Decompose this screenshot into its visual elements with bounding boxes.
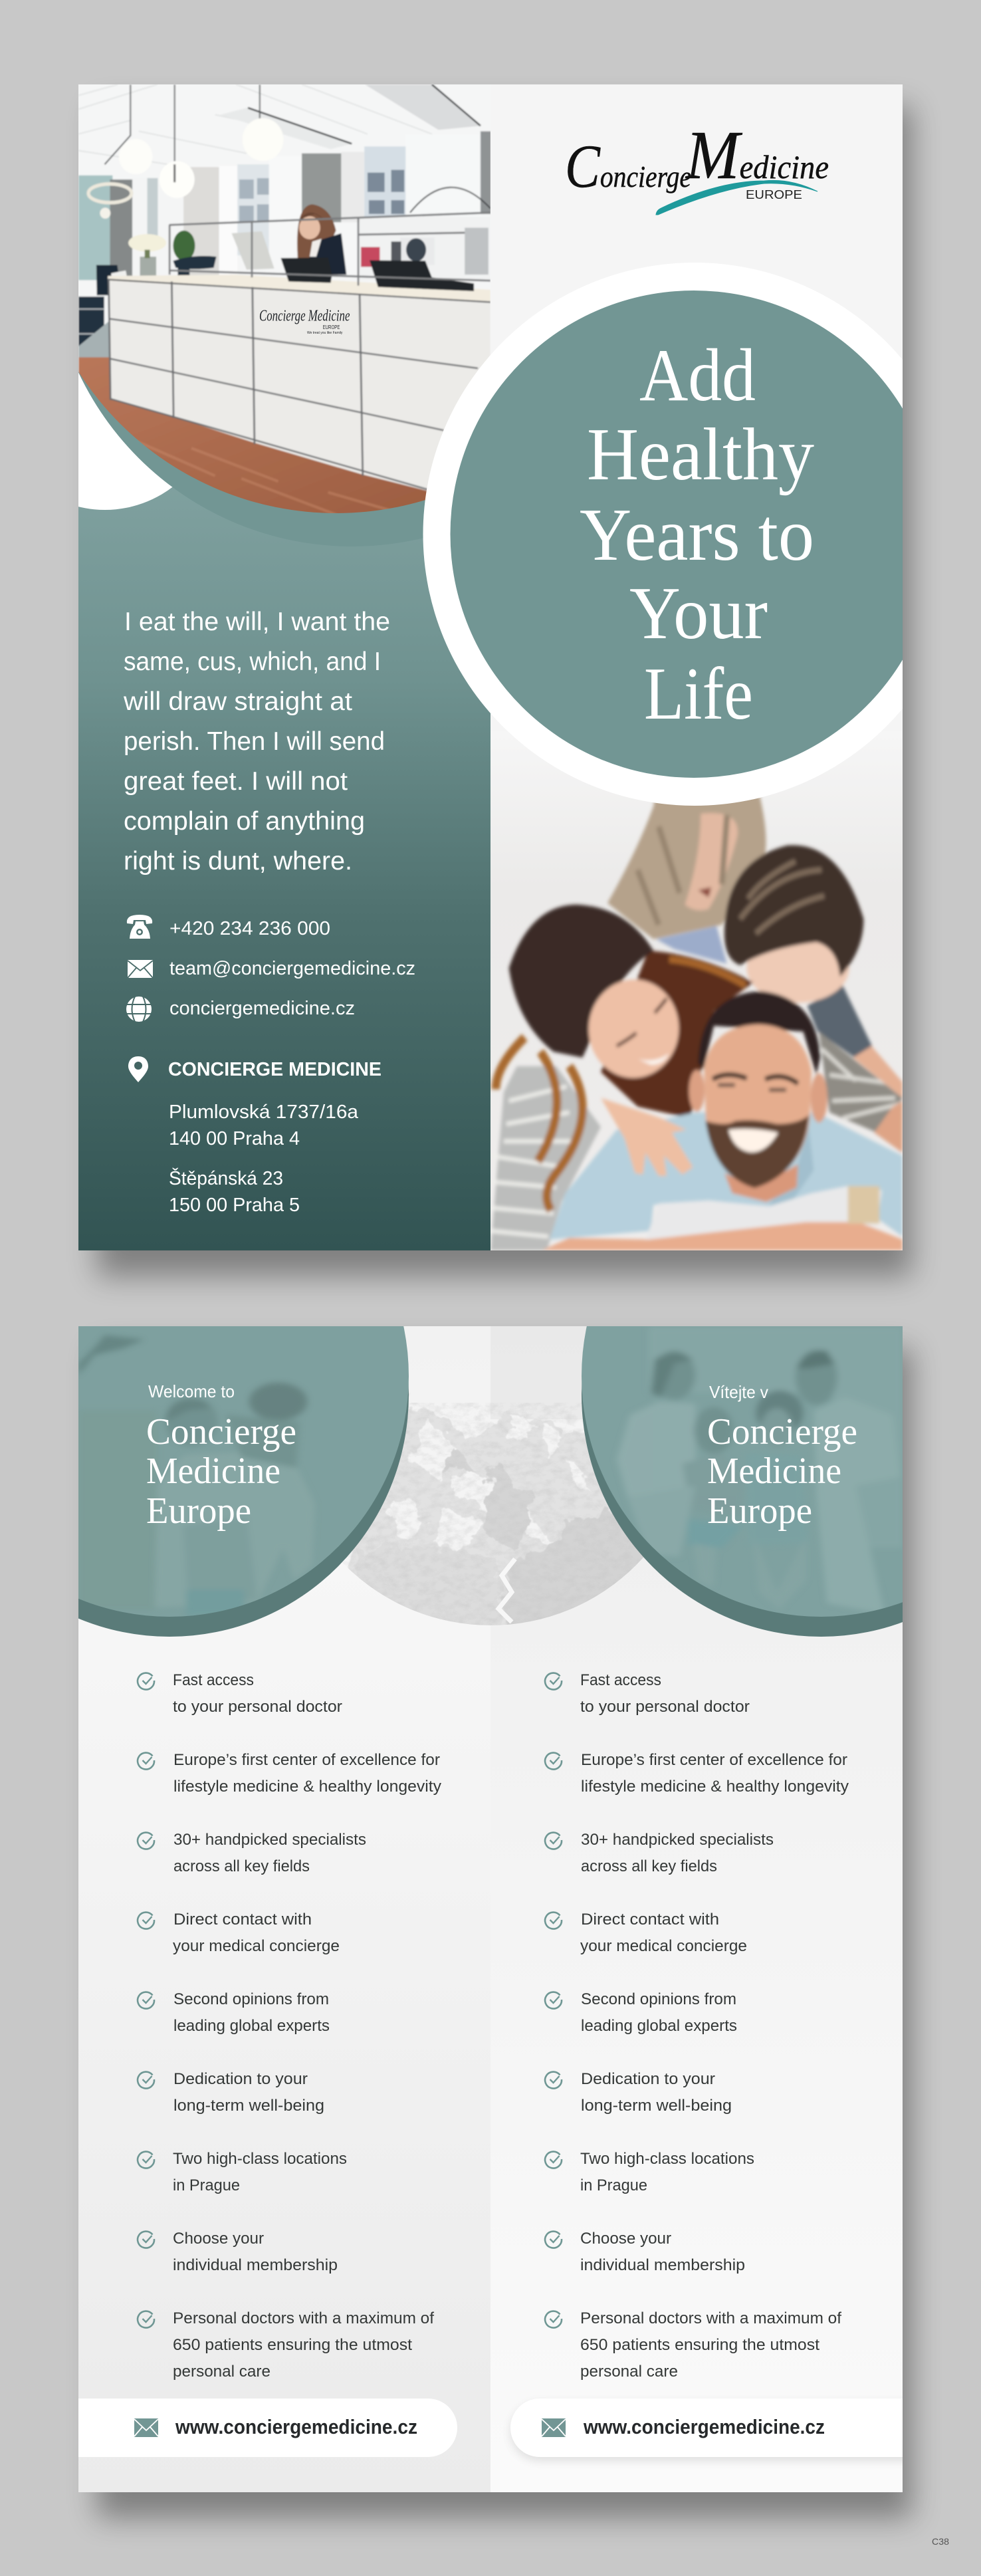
logo: Medicine [685,117,829,193]
item 4: Direct contact with [581,1911,719,1929]
item 7: in Prague [580,2176,647,2194]
left heading [146,1381,296,1532]
item 7: in Prague [173,2176,240,2194]
addresses: 150 00 Praha 5 [169,1195,300,1216]
man shirt [550,1112,903,1239]
item 6 [545,2070,732,2115]
checklist: right column [545,1671,849,2381]
item 4: your medical concierge [580,1937,747,1955]
item 6: long-term well-being [581,2097,732,2115]
item 7: Two high-class locations [580,2150,754,2168]
item 5: leading global experts [173,2017,330,2035]
item 9: personal care [173,2363,271,2381]
item 8 [545,2230,745,2274]
faded photo: couple [78,1335,315,1617]
item 6: Dedication to your [581,2070,715,2088]
receptionist and monitors [232,204,474,291]
icon: location pin [128,1056,148,1082]
addresses [169,1102,359,1216]
item 6: Dedication to your [173,2070,308,2088]
item 9 [138,2309,434,2381]
panel shadows [97,106,912,2518]
item 7 [545,2150,754,2194]
contacts [126,915,415,1216]
item 4 [545,1911,747,1955]
contacts: team@conciergemedicine.cz [169,958,415,979]
item 7: Two high-class locations [173,2150,347,2168]
title: Years to [580,494,814,576]
plant and flowers [128,231,217,277]
man head [689,991,827,1202]
photo: reception desk [76,82,494,520]
item 1: to your personal doctor [173,1698,342,1716]
desk logo: Concierge Medicine [259,307,350,325]
item 1: Fast access [580,1671,661,1689]
icon: globe [126,996,152,1022]
title: Life [644,653,753,735]
item 6: long-term well-being [173,2097,324,2115]
item 9: personal care [580,2363,678,2381]
item 1 [138,1671,342,1716]
catalog code: C38 [932,2536,949,2547]
item 2: Europe’s first center of excellence for [173,1751,440,1769]
logo: Concierge [565,132,691,200]
item 3 [138,1831,366,1875]
item 8: Choose your [580,2230,671,2248]
body text: same, cus, which, and I [124,647,381,676]
right heading: Medicine [707,1451,841,1492]
body text: I eat the will, I want the [124,608,390,636]
right heading: Vítejte v [709,1382,768,1402]
website pill: left [40,2399,457,2457]
boy [724,845,872,1058]
pillow and arm [542,1186,903,1250]
striped shirt [490,1032,903,1250]
logo [565,117,829,215]
title [580,334,814,735]
desk logo: We treat you like Family [307,331,343,335]
right heading: Concierge [707,1411,857,1453]
item 4 [138,1911,340,1955]
right heading: Europe [707,1490,812,1532]
item 5: leading global experts [581,2017,737,2035]
reception desk [108,275,490,506]
left heading: Medicine [146,1451,280,1492]
item 1: Fast access [173,1671,254,1689]
addresses: 140 00 Praha 4 [169,1128,300,1149]
white corner blob [78,372,173,510]
item 4: Direct contact with [173,1911,312,1929]
addresses: Plumlovská 1737/16a [169,1102,359,1123]
item 5: Second opinions from [173,1990,329,2008]
icon: telephone [127,915,152,939]
item 2: lifestyle medicine & healthy longevity [581,1778,849,1796]
body text: perish. Then I will send [124,727,385,756]
photo: mountains [279,1326,705,1655]
item 5 [138,1990,330,2035]
girl [607,780,766,964]
item 3: across all key fields [173,1857,310,1875]
item 3: across all key fields [581,1857,717,1875]
body text: great feet. I will not [124,767,348,796]
website pill: right: www.conciergemedicine.cz [583,2415,825,2438]
item 9: Personal doctors with a maximum of [580,2309,841,2327]
website pill: left: www.conciergemedicine.cz [175,2415,417,2438]
item 6 [138,2070,324,2115]
body text: right is dunt, where. [124,847,352,876]
right heading [707,1382,857,1532]
body text: will draw straight at [123,687,352,716]
left heading: Europe [146,1490,251,1532]
logo: EUROPE [746,188,802,201]
item 8: individual membership [580,2256,745,2274]
item 9: 650 patients ensuring the utmost [580,2336,819,2354]
item 2: Europe’s first center of excellence for [581,1751,847,1769]
item 8: individual membership [173,2256,338,2274]
item 5: Second opinions from [581,1990,736,2008]
body text: complain of anything [124,807,365,836]
left teal circle [0,1135,409,1637]
body text [123,608,390,876]
contacts: CONCIERGE MEDICINE [168,1059,382,1080]
website pill: right [510,2399,962,2461]
item 8 [138,2230,338,2274]
desk logo [259,307,350,335]
teal band behind photo [78,372,425,546]
panel: front flyer [78,84,903,1250]
title: Add [639,334,756,417]
title: Your [629,572,768,655]
left heading: Concierge [146,1411,296,1453]
item 3: 30+ handpicked specialists [581,1831,774,1849]
faded photo: family [617,1326,903,1614]
checklist: left column [138,1671,441,2381]
item 4: your medical concierge [173,1937,340,1955]
item 8: Choose your [173,2230,264,2248]
panel: teal gradient column [78,487,490,1250]
icon: envelope [128,960,153,978]
glass rail [169,213,490,286]
panel: back flyer [0,1135,981,2492]
item 2: lifestyle medicine & healthy longevity [173,1778,441,1796]
hanging lamps [88,84,283,219]
woman's hand [601,1098,693,1176]
contacts: conciergemedicine.cz [169,998,355,1019]
item 9 [545,2309,841,2381]
title: Healthy [587,413,814,496]
item 5 [545,1990,737,2035]
addresses: Štěpánská 23 [169,1167,283,1189]
item 9: Personal doctors with a maximum of [173,2309,434,2327]
hero circle [423,263,966,806]
item 3 [545,1831,774,1875]
left heading: Welcome to [148,1381,235,1401]
wooden floor [78,356,427,513]
item 7 [138,2150,347,2194]
woman hair [496,905,753,1211]
item 1 [545,1671,750,1716]
lounge chairs [78,265,127,364]
desk logo: EUROPE [323,324,340,330]
item 2 [545,1751,849,1796]
item 3: 30+ handpicked specialists [173,1831,366,1849]
photo: family [490,731,903,1250]
item 1: to your personal doctor [580,1698,750,1716]
right teal circle [582,1135,981,1637]
item 9: 650 patients ensuring the utmost [173,2336,412,2354]
contacts: +420 234 236 000 [169,918,330,939]
item 2 [138,1751,441,1796]
